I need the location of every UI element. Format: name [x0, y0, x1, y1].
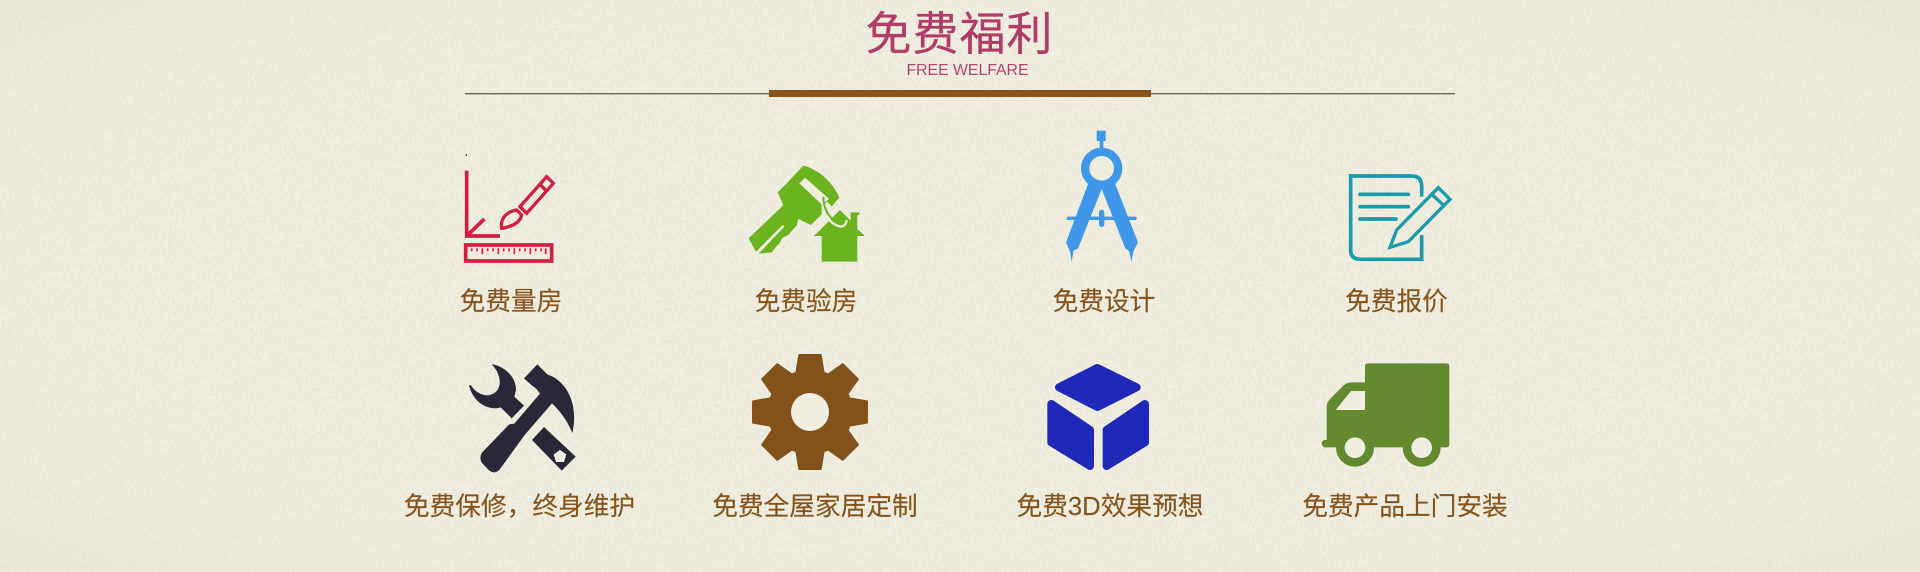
- label: 免费全屋家居定制: [712, 492, 918, 521]
- item: free installation: [1302, 363, 1508, 521]
- item: free measuring: [460, 154, 562, 316]
- icon: compass: [1066, 131, 1138, 262]
- icon: cube: [1051, 368, 1145, 466]
- item: free 3D rendering preview: [1017, 368, 1203, 521]
- icon: key and house: [749, 166, 864, 262]
- label: 免费量房: [460, 287, 562, 316]
- subheading: FREE WELFARE: [906, 62, 1029, 79]
- item: free quotation: [1345, 176, 1450, 316]
- item: free repair: [404, 364, 635, 521]
- label: 免费产品上门安装: [1302, 492, 1508, 521]
- title block: [465, 8, 1455, 97]
- label: 免费3D效果预想: [1017, 492, 1203, 521]
- icon: ruler and brush: [466, 154, 553, 261]
- divider: [465, 90, 1455, 97]
- label: 免费设计: [1053, 287, 1155, 316]
- label: 免费报价: [1345, 287, 1448, 316]
- icon: wrench and hammer: [469, 364, 576, 472]
- icon: truck: [1322, 363, 1449, 467]
- item: free design: [1053, 131, 1155, 316]
- icon: document and pencil: [1351, 176, 1450, 259]
- label: 免费保修，终身维护: [404, 492, 635, 521]
- item: free whole-house customization: [712, 355, 918, 521]
- item: free house inspection: [749, 166, 864, 316]
- heading: 免费福利: [866, 8, 1054, 60]
- icon: gear: [753, 355, 867, 469]
- label: 免费验房: [755, 287, 857, 316]
